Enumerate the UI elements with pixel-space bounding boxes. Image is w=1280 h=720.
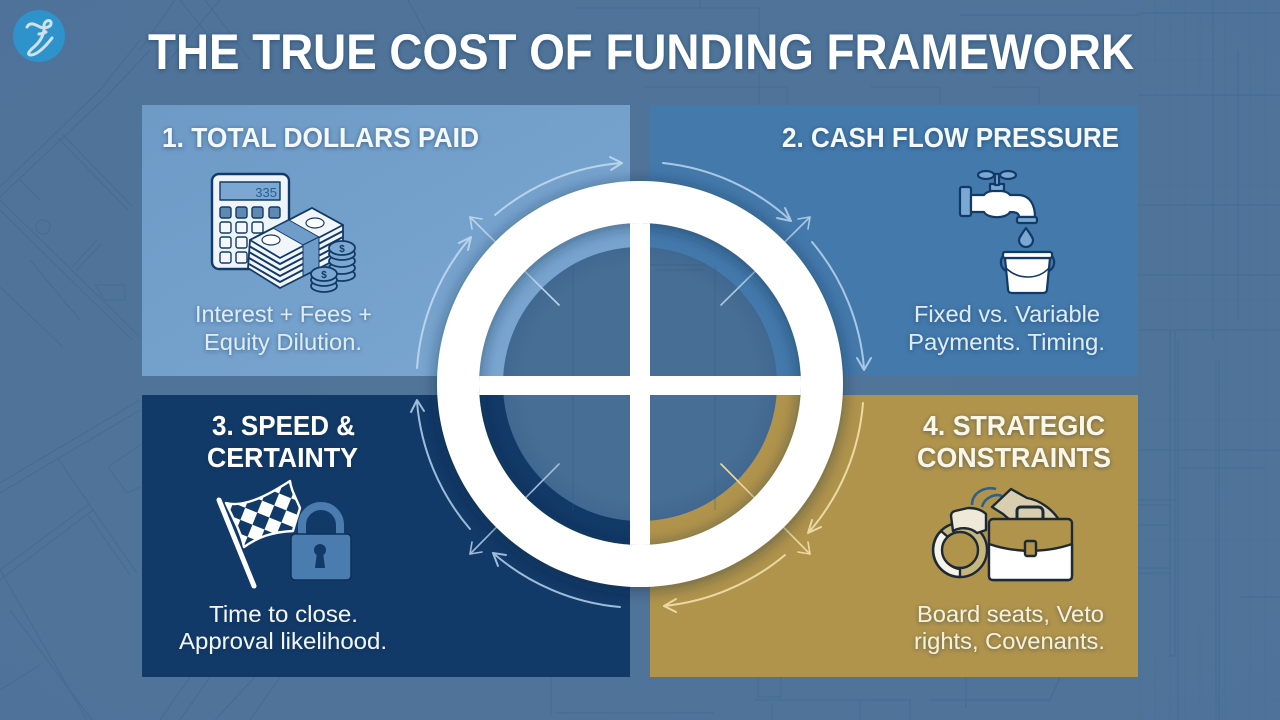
text: panel 2 description: Fixed vs. Variable <box>914 301 1100 327</box>
icon: calculator and cash <box>212 174 355 292</box>
icon: calculator and cash: $ <box>321 270 327 281</box>
hub: white cross <box>475 220 805 550</box>
arrow: panel 2 top arc <box>663 163 791 221</box>
arrow: panel 3 left arc <box>411 400 470 529</box>
text: panel 3 description <box>179 601 387 654</box>
arrow: panel 2 right arc <box>812 242 871 370</box>
icon: handcuffs and briefcase <box>933 488 1072 580</box>
icon: checkered flag and padlock <box>219 481 351 586</box>
text: panel 4 description: rights, Covenants. <box>914 628 1105 654</box>
radial arrows <box>470 217 810 554</box>
logo <box>13 10 65 62</box>
panel: 4 strategic constraints <box>650 395 1138 677</box>
text: panel 3 description: Approval likelihood. <box>179 628 387 654</box>
hub: inner disc <box>503 247 777 521</box>
arrow: panel 4 right arc <box>808 403 863 533</box>
hub: white ring <box>437 181 843 587</box>
text: panel 2 description <box>908 301 1105 355</box>
central ring and cross <box>437 181 843 587</box>
icon: calculator and cash: $ <box>339 244 345 255</box>
text: panel 1 description: Interest + Fees + <box>195 301 372 327</box>
circular arrows around the ring <box>411 157 871 612</box>
text: panel 4 description: Board seats, Veto <box>917 601 1104 627</box>
heading: panel 3 <box>207 410 358 473</box>
arrow: panel 1 top arc <box>495 157 622 215</box>
heading: panel 4 <box>917 410 1111 473</box>
text: panel 3 description: Time to close. <box>209 601 358 627</box>
text: panel 2 description: Payments. Timing. <box>908 329 1105 355</box>
panel: 1 total dollars paid <box>142 105 630 376</box>
text: panel 1 description: Equity Dilution. <box>204 329 362 355</box>
heading: panel 4: CONSTRAINTS <box>917 442 1111 473</box>
heading: panel 3: CERTAINTY <box>207 442 358 473</box>
heading: panel 4: 4. STRATEGIC <box>923 410 1105 441</box>
arrow: panel 4 bottom arc <box>664 555 785 612</box>
title: THE TRUE COST OF FUNDING FRAMEWORK <box>148 24 1134 80</box>
panel: 2 cash flow pressure <box>650 105 1138 376</box>
panel: 3 speed and certainty <box>142 395 630 677</box>
icon: calculator and cash: 335 <box>255 185 277 200</box>
heading: panel 2: 2. CASH FLOW PRESSURE <box>782 122 1119 153</box>
icon: dripping tap and bucket <box>960 171 1054 293</box>
arrow: panel 1 left arc <box>417 237 471 368</box>
text: panel 4 description <box>914 601 1105 654</box>
heading: panel 1: 1. TOTAL DOLLARS PAID <box>162 122 479 153</box>
text: panel 1 description <box>195 301 372 355</box>
arrow: panel 3 bottom arc <box>493 553 620 607</box>
heading: panel 3: 3. SPEED & <box>212 410 355 441</box>
